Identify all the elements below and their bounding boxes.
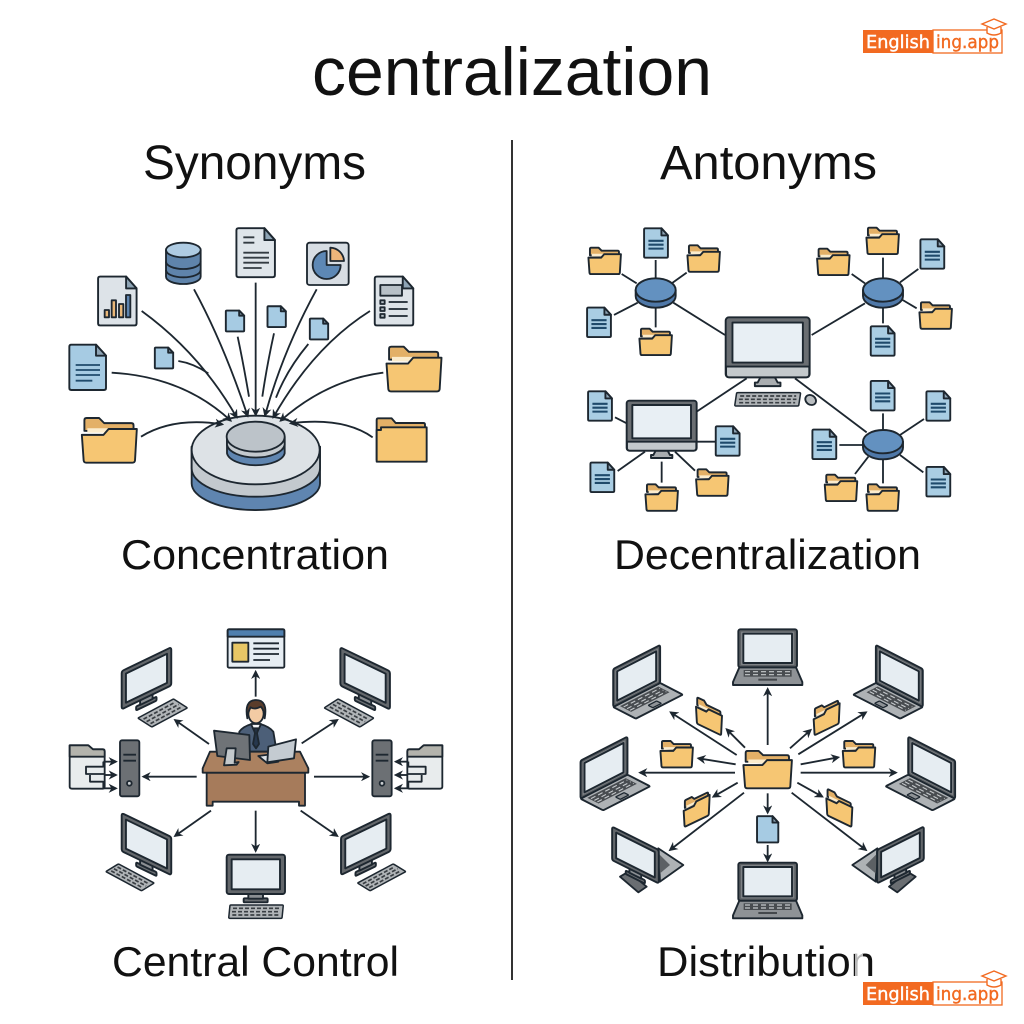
title: centralization xyxy=(312,34,712,110)
icons: storage hubs xyxy=(636,278,903,459)
illustration: decentralization xyxy=(587,228,952,511)
label: Concentration: Concentration xyxy=(121,531,389,578)
icon: central folder xyxy=(743,751,792,788)
label: Central Control: Central Control xyxy=(112,938,399,985)
icon: folder bottom left xyxy=(82,418,137,463)
heading: Synonyms: Synonyms xyxy=(143,137,366,190)
logo bottom: English xyxy=(866,984,930,1005)
icon: web page card xyxy=(228,629,284,668)
center divider xyxy=(511,140,513,980)
desk laptop xyxy=(258,739,296,763)
illustration: distribution xyxy=(581,629,955,918)
icon: left tower and folder xyxy=(70,740,139,796)
icon: right tower and folder xyxy=(372,740,442,796)
converging arrows xyxy=(112,283,383,437)
outward arrows xyxy=(143,672,368,851)
icon: lower left screen xyxy=(612,827,683,892)
icons: folders xyxy=(588,228,952,511)
label: Decentralization: Decentralization xyxy=(614,531,921,578)
illustration: concentration xyxy=(69,228,441,510)
icons: surrounding laptops xyxy=(581,629,955,918)
icon: folder bottom right xyxy=(377,418,427,462)
person at desk xyxy=(238,700,277,752)
logo top: ing.app xyxy=(936,32,999,53)
heading: Antonyms: Antonyms xyxy=(660,137,877,190)
outward arrows xyxy=(640,689,896,861)
icon: database xyxy=(166,243,201,284)
desk xyxy=(203,752,308,806)
icons: documents xyxy=(587,228,950,496)
desk monitor xyxy=(214,731,250,765)
icon: lower right screen xyxy=(852,827,924,892)
faded patch over final letter xyxy=(855,954,863,978)
logo top xyxy=(863,19,1006,53)
logo bottom: ing.app xyxy=(936,984,999,1005)
network links xyxy=(614,258,924,483)
icon: folder top right xyxy=(386,347,441,391)
icon: pie chart card xyxy=(307,243,349,285)
icons: monitors with keyboards xyxy=(106,647,406,918)
central storage disk xyxy=(192,416,320,510)
logo bottom xyxy=(863,971,1006,1005)
icon: text document blue xyxy=(69,345,106,390)
label: Distribution: Distribution xyxy=(657,938,875,985)
icon: text document gray xyxy=(236,228,275,277)
illustration: central control xyxy=(70,629,442,918)
icon: document xyxy=(757,816,778,842)
icon: chart document xyxy=(98,277,137,325)
icon: secondary computer xyxy=(627,401,697,458)
icons: small folders xyxy=(660,697,875,827)
logo top: English xyxy=(866,32,930,53)
icons: small documents xyxy=(155,306,328,368)
icon: main computer xyxy=(726,317,818,407)
icon: form document xyxy=(375,277,413,325)
